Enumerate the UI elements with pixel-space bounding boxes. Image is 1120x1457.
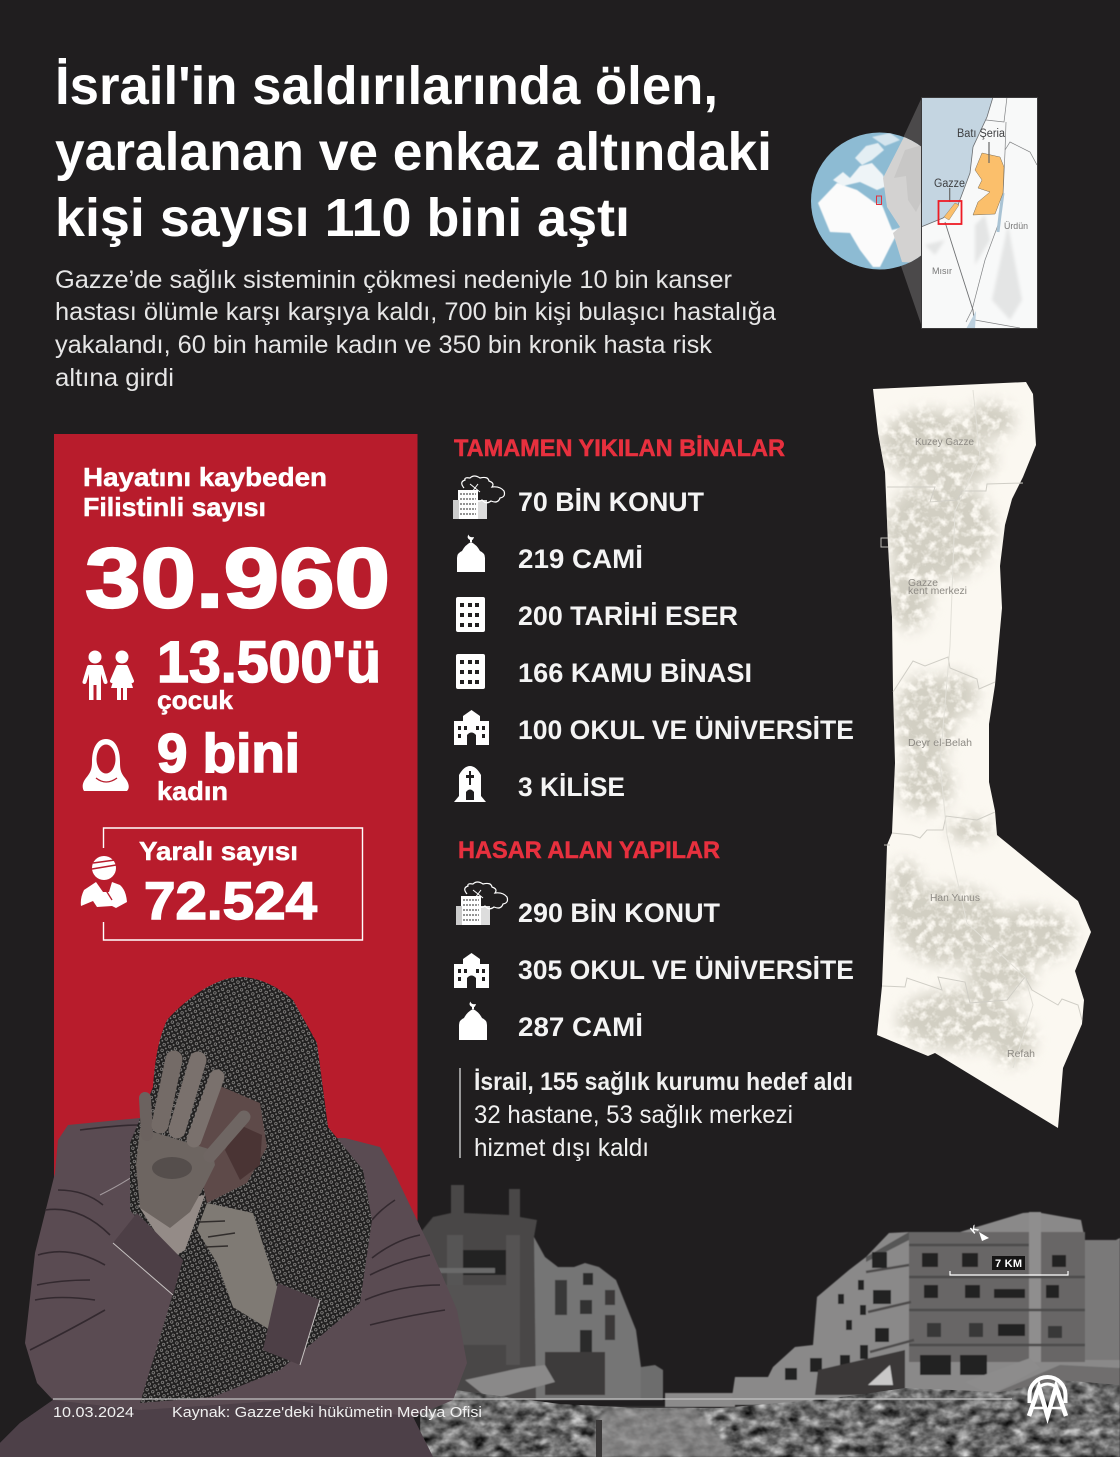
governorate boundaries and road bbox=[882, 390, 1082, 1068]
right ruined buildings bbox=[732, 1212, 1120, 1405]
icon: woman in headscarf bbox=[83, 739, 129, 791]
icon: mosque bbox=[457, 534, 485, 572]
red statistics panel bbox=[54, 434, 418, 1234]
subtitle text block bbox=[55, 266, 776, 392]
woman photo cutout bbox=[0, 977, 467, 1457]
north arrow: K bbox=[969, 1223, 982, 1237]
children count: 13.500'ü bbox=[157, 630, 381, 695]
panel background bbox=[54, 434, 418, 1234]
row: homes: 70 BİN KONUT bbox=[518, 487, 704, 517]
right hand bbox=[197, 1203, 278, 1330]
scale and north arrow bbox=[950, 1223, 1068, 1275]
inset map: Batı Şeria bbox=[957, 128, 1006, 140]
map labels: Refah bbox=[1007, 1049, 1035, 1060]
note text: 32 hastane, 53 sağlık merkezi bbox=[474, 1101, 793, 1129]
inset map: Ürdün bbox=[1004, 221, 1028, 232]
row: public buildings: 166 KAMU BİNASI bbox=[518, 658, 752, 688]
icon: building bbox=[456, 597, 485, 632]
section: destroyed buildings bbox=[453, 435, 854, 802]
row: churches: 3 KİLİSE bbox=[518, 772, 625, 802]
note rule bbox=[459, 1068, 461, 1158]
row: mosques bbox=[457, 534, 643, 574]
dress bbox=[0, 1118, 467, 1457]
icon: children bbox=[84, 650, 133, 700]
locator map: globe and inset bbox=[810, 97, 1038, 329]
death toll number: 30.960 bbox=[85, 531, 390, 625]
footer bbox=[53, 1377, 1066, 1421]
icon: burning building bbox=[456, 882, 508, 925]
wounded number: 72.524 bbox=[144, 872, 318, 931]
row: homes bbox=[453, 476, 704, 519]
row: mosques: 287 CAMİ bbox=[518, 1012, 643, 1042]
note text bbox=[474, 1068, 853, 1162]
map labels: Kuzey Gazze bbox=[915, 437, 974, 448]
dress folds bbox=[30, 1125, 445, 1350]
children count: çocuk bbox=[157, 685, 234, 715]
connector between globe and inset bbox=[901, 97, 922, 327]
sleeves bbox=[113, 1213, 183, 1295]
icon: building bbox=[456, 654, 485, 689]
section: damaged structures bbox=[454, 837, 854, 1042]
rubble and street bbox=[420, 1380, 1120, 1457]
map labels: Deyr el-Belah bbox=[908, 738, 972, 749]
heading: TAMAMEN YIKILAN BİNALAR bbox=[454, 435, 785, 462]
ruined street photo bbox=[420, 1185, 1120, 1457]
scale bar: 7 KM bbox=[995, 1258, 1022, 1270]
title: yaralanan ve enkaz altındaki bbox=[55, 122, 772, 182]
map land shape bbox=[873, 382, 1091, 1128]
women count: kadın bbox=[157, 776, 228, 806]
map labels: Gazze bbox=[908, 578, 938, 589]
map labels: Han Yunus bbox=[930, 893, 980, 904]
icon: injured person bbox=[81, 856, 127, 908]
heading: deaths bbox=[83, 462, 327, 522]
note text: hizmet dışı kaldı bbox=[474, 1134, 649, 1162]
subtitle text block: altına girdi bbox=[55, 364, 174, 392]
date: 10.03.2024 bbox=[53, 1404, 134, 1421]
globe bbox=[811, 132, 921, 270]
source: Kaynak: Gazze'deki hükümetin Medya Ofisi bbox=[172, 1404, 482, 1421]
logo: Anadolu Agency bbox=[1029, 1377, 1066, 1416]
heading: deaths: Hayatını kaybeden bbox=[83, 462, 327, 492]
note text: İsrail, 155 sağlık kurumu hedef aldı bbox=[474, 1068, 853, 1096]
subtitle text block: hastası ölümle karşı karşıya kaldı, 700 bin kişi bulaşıcı hastalığa bbox=[55, 298, 776, 326]
icon: burning building bbox=[453, 476, 504, 519]
row: homes: 290 BİN KONUT bbox=[518, 898, 720, 928]
inset map: Gazze bbox=[934, 178, 965, 190]
row: mosques: 219 CAMİ bbox=[518, 544, 643, 574]
icon: school bbox=[454, 953, 489, 988]
icon: mosque bbox=[459, 1002, 487, 1040]
subtitle text block: Gazze’de sağlık sisteminin çökmesi nedeniyle 10 bin kanser bbox=[55, 266, 732, 294]
box outline bbox=[104, 828, 362, 940]
left ruined buildings bbox=[420, 1185, 663, 1400]
health facilities note bbox=[460, 1068, 853, 1162]
inset map bbox=[921, 97, 1038, 329]
women count: 9 bini bbox=[157, 722, 300, 784]
port marks bbox=[881, 538, 890, 845]
left forearm bbox=[138, 1195, 205, 1258]
map labels bbox=[908, 437, 1035, 1060]
title bbox=[55, 56, 772, 248]
row: churches bbox=[454, 766, 625, 802]
Gaza Strip map bbox=[870, 380, 1095, 1130]
row: schools: 100 OKUL VE ÜNİVERSİTE bbox=[518, 715, 854, 745]
map labels: kent merkezi bbox=[908, 586, 967, 597]
heading: HASAR ALAN YAPILAR bbox=[458, 837, 720, 864]
row: public buildings bbox=[456, 654, 752, 689]
wounded box bbox=[81, 828, 363, 940]
distant buildings at end of street bbox=[665, 1393, 735, 1407]
left hand bbox=[136, 1059, 244, 1228]
row: historic sites: 200 TARİHİ ESER bbox=[518, 601, 738, 631]
subtitle text block: yakalandı, 60 bin hamile kadın ve 350 bin kronik hasta risk bbox=[55, 331, 712, 359]
row: homes bbox=[456, 882, 720, 928]
icon: church bbox=[454, 766, 486, 802]
row: mosques bbox=[459, 1002, 643, 1042]
face bbox=[195, 1083, 267, 1203]
map urban areas bbox=[878, 396, 1080, 1070]
icon: school bbox=[454, 710, 489, 745]
wounded label: Yaralı sayısı bbox=[139, 836, 298, 866]
heading: deaths: Filistinli sayısı bbox=[83, 492, 266, 522]
footer rule bbox=[53, 1398, 1012, 1400]
row: historic sites bbox=[456, 597, 738, 632]
inset map: Mısır bbox=[932, 266, 952, 277]
title: İsrail'in saldırılarında ölen, bbox=[55, 56, 718, 116]
title: kişi sayısı 110 bini aştı bbox=[55, 188, 630, 248]
row: schools: 305 OKUL VE ÜNİVERSİTE bbox=[518, 955, 854, 985]
headscarf bbox=[130, 977, 372, 1403]
